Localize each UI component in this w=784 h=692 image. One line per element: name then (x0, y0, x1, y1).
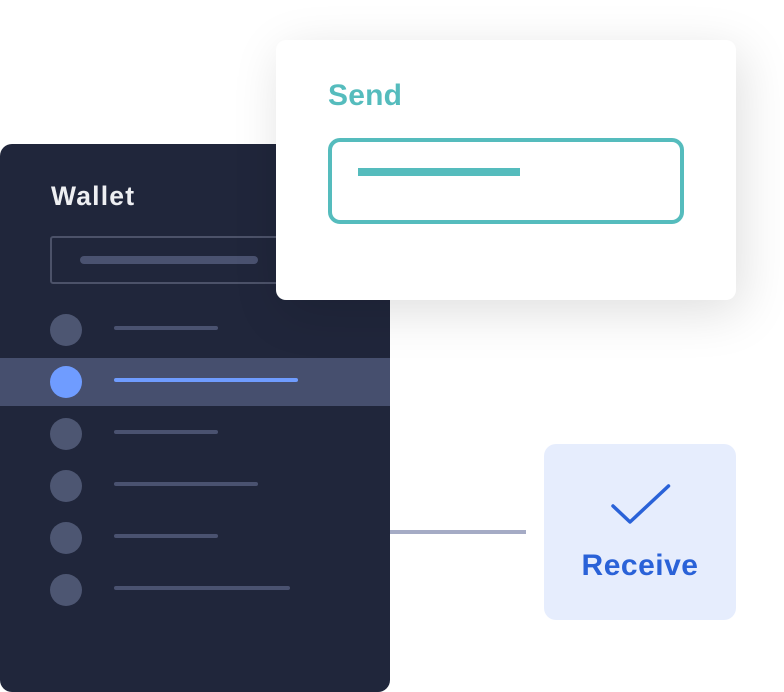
label line (114, 482, 258, 486)
list row 5 (50, 522, 218, 554)
search placeholder bar (80, 256, 258, 264)
list row 1 (50, 314, 218, 346)
avatar (50, 418, 82, 450)
list row 3 (50, 418, 218, 450)
search field (50, 236, 350, 284)
panel: receive (544, 444, 736, 620)
avatar (50, 470, 82, 502)
label line (114, 326, 218, 330)
list row 4 (50, 470, 258, 502)
list row 2: highlighted (0, 358, 390, 406)
panel: wallet (0, 144, 390, 692)
input value bar (358, 168, 520, 176)
avatar (50, 522, 82, 554)
label line (114, 534, 218, 538)
label line (114, 430, 218, 434)
icon: check mark (611, 484, 670, 524)
heading: Send: Send (328, 79, 402, 112)
avatar (50, 574, 82, 606)
label line (114, 586, 290, 590)
connector line (390, 530, 526, 534)
label: Receive: Receive (582, 549, 698, 582)
heading: Wallet: Wallet (51, 181, 135, 211)
send input field (328, 138, 684, 224)
avatar (50, 314, 82, 346)
label line (114, 378, 298, 382)
list row 6 (50, 574, 290, 606)
avatar (50, 366, 82, 398)
panel: send (276, 40, 736, 300)
